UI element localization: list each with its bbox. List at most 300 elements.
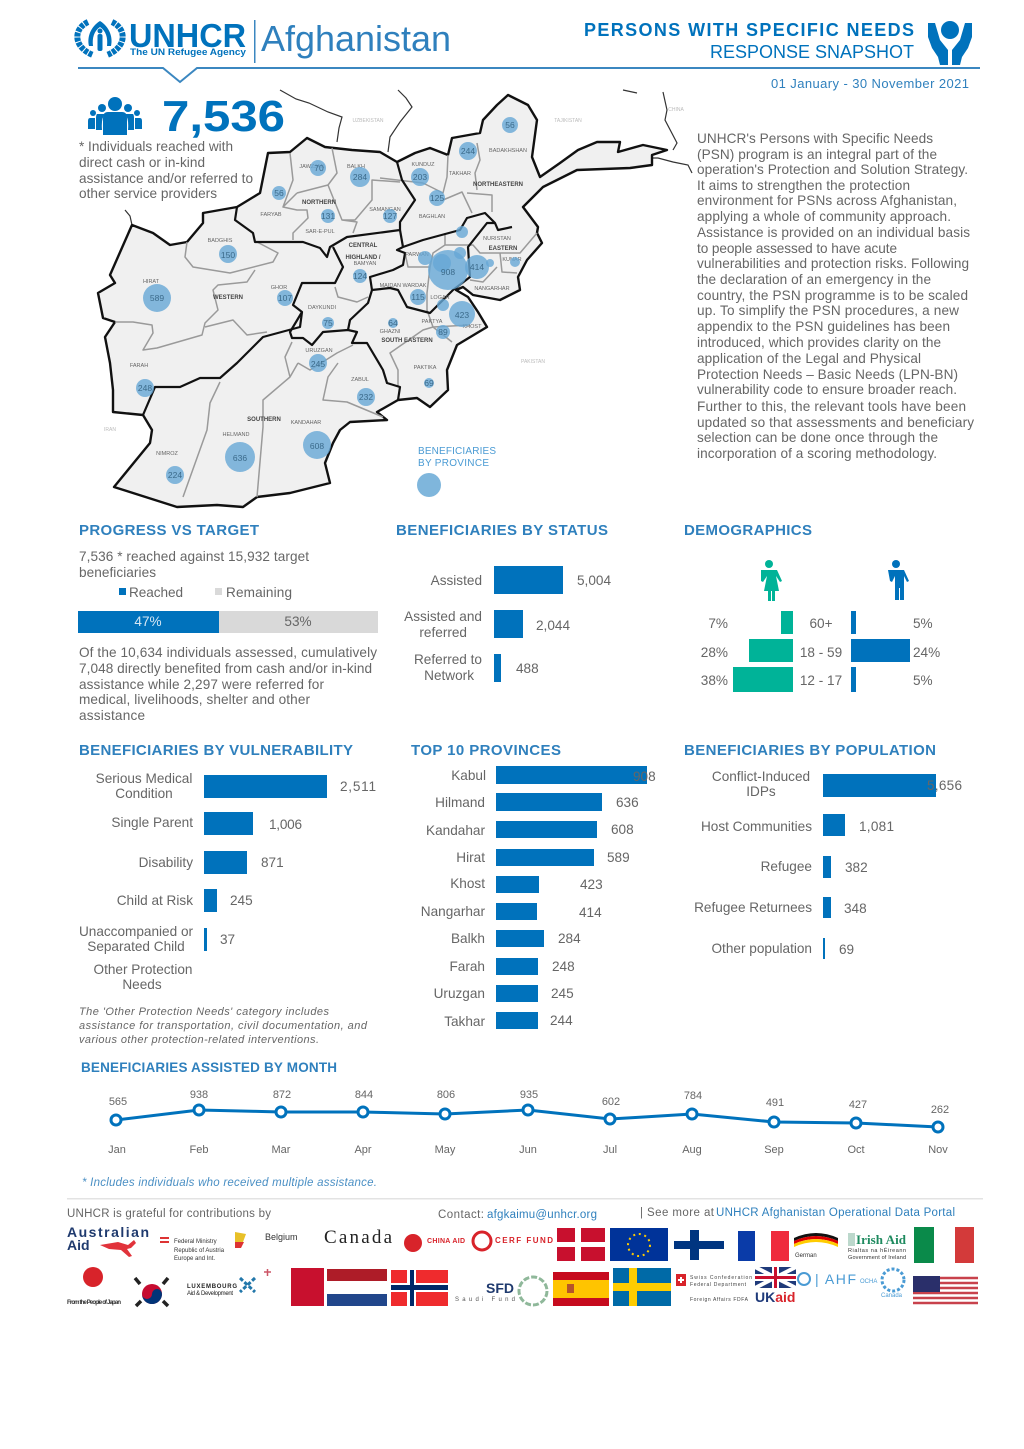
panel: beneficiaries by vulnerability: Needs <box>122 977 162 992</box>
Belgium: Belgium <box>265 1232 298 1242</box>
Saudi Fund for Development <box>455 1277 547 1305</box>
Austria: Republic of Austria <box>174 1248 225 1254</box>
bubble values: 64 <box>388 318 398 328</box>
panel: top 10 provinces: 414 <box>579 905 602 920</box>
flag: Sweden <box>613 1268 671 1306</box>
key figure: individuals reached: 7,536 <box>162 92 285 141</box>
icon: male <box>888 560 909 600</box>
Austria: Federal Ministry <box>174 1239 217 1245</box>
province labels: ZABUL <box>351 377 369 383</box>
panel: progress vs target <box>78 522 378 723</box>
panel: top 10 provinces: Kandahar <box>426 823 485 838</box>
province labels: KUNDUZ <box>412 162 435 168</box>
values: 806 <box>437 1089 455 1101</box>
month axis: Jan <box>108 1144 126 1156</box>
Saudi Fund for Development: SFD <box>486 1280 514 1296</box>
region labels: SOUTH EASTERN <box>381 338 433 344</box>
header rule with pointer <box>78 68 980 82</box>
panel: beneficiaries by vulnerability: Unaccompanied or <box>79 924 194 939</box>
month axis: Apr <box>354 1144 372 1156</box>
province labels: NIMROZ <box>156 451 178 457</box>
panel: progress vs target: 7,536 * reached against 15,932 target <box>79 549 309 564</box>
panel: beneficiaries by status: Referred to <box>414 652 482 667</box>
male bars <box>851 611 910 692</box>
age and share labels: 38% <box>701 673 728 688</box>
values: 427 <box>849 1099 867 1111</box>
panel: top 10 provinces: Balkh <box>451 931 485 946</box>
panel: top 10 provinces: Kabul <box>451 768 486 783</box>
bubble values <box>138 120 515 480</box>
values: 938 <box>190 1089 208 1101</box>
AHF <box>798 1271 877 1287</box>
Irish Aid: Government of Ireland <box>848 1255 906 1261</box>
Irish Aid <box>848 1232 907 1261</box>
footer: contributions and contact: | See more at <box>640 1207 715 1219</box>
flag: European Union <box>610 1228 668 1261</box>
bubble values: 248 <box>138 383 152 393</box>
province labels: PARWAN <box>405 252 429 258</box>
panel: top 10 provinces: Uruzgan <box>434 986 485 1001</box>
country title: Afghanistan <box>261 18 451 59</box>
Japan <box>67 1267 121 1306</box>
province labels: HELMAND <box>223 432 249 438</box>
values: 872 <box>273 1089 291 1101</box>
bubble values: 414 <box>470 262 484 272</box>
province labels <box>130 148 527 457</box>
province labels: PAKTIKA <box>414 365 437 371</box>
month axis: Aug <box>682 1144 702 1156</box>
age and share labels: 7% <box>708 616 728 631</box>
province labels: GHOR <box>271 285 287 291</box>
text: programme narrative: It aims to strengthen the protection <box>697 178 910 193</box>
Switzerland: Swiss Confederation <box>690 1275 752 1281</box>
text: programme narrative: (PSN) program is an integral part of the <box>697 147 937 162</box>
panel: beneficiaries by population: 69 <box>839 942 854 957</box>
icon: hands protecting person <box>928 21 972 65</box>
panel: beneficiaries by vulnerability: BENEFICIARIES BY VULNERABILITY <box>79 742 353 759</box>
AHF: OCHA <box>860 1279 877 1285</box>
Germany <box>794 1233 838 1259</box>
legend: Remaining <box>226 585 292 600</box>
bubble values: 224 <box>168 470 182 480</box>
month axis: Sep <box>764 1144 784 1156</box>
neighbouring country labels: PAKISTAN <box>521 359 545 365</box>
bubble values: 245 <box>311 359 325 369</box>
Australian Aid <box>67 1224 149 1257</box>
text: programme narrative: applying a whole of community approach. <box>697 209 951 224</box>
panel: beneficiaries by status: 2,044 <box>536 618 570 633</box>
header: report title <box>584 20 914 62</box>
Luxembourg: LUXEMBOURG <box>187 1284 237 1290</box>
bubble values: 203 <box>413 172 427 182</box>
panel: top 10 provinces: 589 <box>607 850 630 865</box>
female bars <box>733 611 793 692</box>
province labels: NURISTAN <box>483 236 511 242</box>
province labels: NANGARHAR <box>474 286 510 292</box>
panel: top 10 provinces: 423 <box>580 877 603 892</box>
region labels: HIGHLAND / <box>346 255 381 261</box>
panel: beneficiaries by population: IDPs <box>746 784 776 799</box>
text: programme narrative <box>697 131 974 461</box>
neighbouring borders <box>125 90 692 225</box>
bubble values: 127 <box>383 211 397 221</box>
panel: demographics: DEMOGRAPHICS <box>684 522 812 539</box>
Germany: German <box>795 1253 817 1259</box>
panel: top 10 provinces: 908 <box>633 769 656 784</box>
panel: beneficiaries by status: BENEFICIARIES BY STATUS <box>396 522 608 539</box>
province labels: HIRAT <box>143 279 160 285</box>
UN emblem <box>881 1269 904 1299</box>
panel: progress vs target: assistance <box>79 708 145 723</box>
text: programme narrative: vulnerabilities and protection risks. Following <box>697 256 969 271</box>
text: programme narrative: appendix to the PSN guidelines has been <box>697 319 950 334</box>
header: UNHCR logo and country title <box>77 17 451 63</box>
region labels: EASTERN <box>489 246 517 252</box>
flag: France <box>738 1231 789 1261</box>
text: key figure note: direct cash or in-kind <box>79 155 205 170</box>
panel: beneficiaries by status: referred <box>419 625 467 640</box>
province labels: KUNAR <box>502 257 522 263</box>
panel: beneficiaries by population: Refugee <box>761 859 812 874</box>
province labels: DAYKUNDI <box>308 305 336 311</box>
values: 935 <box>520 1089 538 1101</box>
flag: Monaco <box>291 1268 324 1306</box>
month axis: Mar <box>272 1144 291 1156</box>
Belgium <box>235 1232 298 1248</box>
panel: beneficiaries by status: Assisted <box>431 573 482 588</box>
panel: beneficiaries by status: 488 <box>516 661 539 676</box>
panel: beneficiaries by vulnerability: Other Protection <box>94 962 192 977</box>
panel: beneficiaries by vulnerability: 2,511 <box>340 779 376 794</box>
text: programme narrative: vulnerability code to ensure broader reach. <box>697 382 957 397</box>
text: programme narrative: to people assessed to have acute <box>697 241 897 256</box>
footer: contributions and contact: Contact: <box>438 1209 484 1221</box>
map legend: BY PROVINCE <box>418 458 489 469</box>
region labels: SOUTHERN <box>247 417 281 423</box>
UK aid <box>755 1267 796 1305</box>
bubble values: 75 <box>323 318 333 328</box>
footer: contributions and contact: afgkaimu@unhcr.org <box>487 1209 597 1221</box>
province labels: BALKH <box>347 164 365 170</box>
province labels: SAMANGAN <box>369 207 401 213</box>
province labels: BAGHLAN <box>419 214 445 220</box>
values: 784 <box>684 1090 702 1102</box>
bubble values: 70 <box>314 163 324 173</box>
month axis: Jul <box>603 1144 617 1156</box>
footer: contributions and contact <box>67 1207 955 1221</box>
age and share labels: 18 - 59 <box>800 645 842 660</box>
flag: Republic of Korea <box>135 1278 168 1306</box>
progress bar: 47% <box>134 614 162 629</box>
province labels: KANDAHAR <box>291 420 321 426</box>
panel: top 10 provinces: Hirat <box>456 850 485 865</box>
text: programme narrative: UNHCR's Persons with Specific Needs <box>697 131 933 146</box>
text: programme narrative: country, the PSN programme is to be scaled <box>697 288 968 303</box>
neighbouring country labels <box>104 107 684 433</box>
text: key figure note <box>79 139 253 201</box>
panel: top 10 provinces: 636 <box>616 795 639 810</box>
chart: beneficiaries assisted by month: BENEFICIARIES ASSISTED BY MONTH <box>81 1060 337 1075</box>
panel: beneficiaries by population: Other population <box>711 941 812 956</box>
Switzerland: Federal Department <box>690 1282 747 1288</box>
age and share labels: 12 - 17 <box>800 673 842 688</box>
header: report title: PERSONS WITH SPECIFIC NEEDS <box>584 20 914 40</box>
date range: 01 January - 30 November 2021 <box>771 76 969 91</box>
panel: top 10 provinces: 284 <box>558 931 581 946</box>
age and share labels: 24% <box>913 645 940 660</box>
text: programme narrative: operation's Protection and Solution Strategy. <box>697 162 968 177</box>
note: assistance for transportation, civil documentation, and <box>79 1020 368 1032</box>
values: 565 <box>109 1096 127 1108</box>
bubble values: 636 <box>233 453 247 463</box>
panel: top 10 provinces: 608 <box>611 822 634 837</box>
province labels: FARYAB <box>260 212 282 218</box>
neighbouring country labels: IRAN <box>104 427 116 433</box>
age and share labels: 5% <box>913 616 933 631</box>
bubble values: 589 <box>150 293 164 303</box>
panel: top 10 provinces: TOP 10 PROVINCES <box>411 742 561 759</box>
text: programme narrative: selection can be done once through the <box>697 430 938 445</box>
age and share labels <box>701 616 940 688</box>
province labels: PAKTYA <box>422 319 443 325</box>
legend <box>119 585 292 600</box>
panel: top 10 provinces <box>411 742 656 1029</box>
panel: top 10 provinces: 244 <box>550 1013 573 1028</box>
panel: beneficiaries by vulnerability: Condition <box>115 786 173 801</box>
text: key figure note: other service providers <box>79 186 217 201</box>
map legend: BENEFICIARIES <box>418 446 496 457</box>
region labels: NORTHERN <box>302 200 336 206</box>
bubbles: beneficiaries by province <box>136 117 520 484</box>
note <box>79 1006 368 1046</box>
bubble values: 284 <box>353 172 367 182</box>
Japan: From the People of Japan <box>67 1300 121 1306</box>
bubble values: 69 <box>424 378 434 388</box>
region labels <box>213 182 523 423</box>
progress bar <box>78 611 378 633</box>
note: various other protection-related interventions. <box>79 1034 319 1046</box>
Luxembourg <box>187 1269 271 1297</box>
chart: beneficiaries assisted by month <box>81 1060 949 1156</box>
panel: beneficiaries by population: 348 <box>844 901 867 916</box>
panel: beneficiaries by population: 1,081 <box>859 819 894 834</box>
panel: top 10 provinces: Hilmand <box>435 795 485 810</box>
panel: beneficiaries by vulnerability: Separated Child <box>87 939 185 954</box>
bubble values: 423 <box>455 310 469 320</box>
province labels: JAWZJAN <box>299 164 325 170</box>
province labels: KHOST <box>463 324 482 330</box>
China Aid: CHINA AID <box>427 1238 465 1245</box>
footer: contributions and contact: UNHCR Afghanistan Operational Data Portal <box>716 1207 955 1219</box>
Canada: Canada <box>324 1227 393 1248</box>
progress bar: 53% <box>284 614 312 629</box>
panel: beneficiaries by population: 382 <box>845 860 868 875</box>
CERF <box>473 1232 553 1250</box>
bubble values: 150 <box>221 250 235 260</box>
province labels: SAR-E-PUL <box>305 229 335 235</box>
Australian Aid: Aid <box>67 1237 90 1253</box>
bubble values: 124 <box>353 271 367 281</box>
Switzerland: Foreign Affairs FDFA <box>690 1297 749 1303</box>
panel: beneficiaries by population: Refugee Returnees <box>694 900 812 915</box>
panel: beneficiaries by vulnerability: Single Parent <box>111 815 193 830</box>
panel: progress vs target: assistance while 2,297 were referred for <box>79 677 324 692</box>
text: programme narrative: introduced, which provides clarity on the <box>697 335 941 350</box>
region labels: NORTHEASTERN <box>473 182 523 188</box>
values <box>109 1089 949 1116</box>
legend: Reached <box>129 585 183 600</box>
month axis: May <box>435 1144 456 1156</box>
flag: Netherlands <box>327 1269 387 1306</box>
bubble values: 131 <box>321 211 335 221</box>
bubble values: 232 <box>359 392 373 402</box>
age and share labels: 60+ <box>809 616 833 631</box>
panel: beneficiaries by vulnerability: 245 <box>230 893 253 908</box>
panel: beneficiaries by population: 5,656 <box>927 778 962 793</box>
panel: top 10 provinces: 245 <box>551 986 574 1001</box>
province labels: FARAH <box>130 363 148 369</box>
province labels: BADGHIS <box>208 238 233 244</box>
AHF: | AHF <box>815 1271 856 1287</box>
values: 262 <box>931 1104 949 1116</box>
bubble values: 115 <box>411 292 425 302</box>
province labels: GHAZNI <box>380 329 401 335</box>
province labels: BAMYAN <box>354 261 376 267</box>
text: programme narrative: environment for PSNs across Afghanistan, <box>697 193 957 208</box>
region labels: WESTERN <box>213 295 243 301</box>
Switzerland <box>676 1274 752 1303</box>
panel: beneficiaries by vulnerability: 871 <box>261 855 284 870</box>
panel: beneficiaries by status: 5,004 <box>577 573 611 588</box>
Australian Aid: Australian <box>67 1224 149 1240</box>
panel: top 10 provinces: Khost <box>450 876 485 891</box>
text: programme narrative: application of the Legal and Physical <box>697 351 921 366</box>
panel: beneficiaries by population: Conflict-Induced <box>712 769 810 784</box>
bubble values: 89 <box>438 327 448 337</box>
panel: beneficiaries by vulnerability: Serious Medical <box>96 771 192 786</box>
month axis: Nov <box>928 1144 948 1156</box>
logo tagline: The UN Refugee Agency <box>130 47 246 57</box>
panel: demographics <box>684 522 940 692</box>
age and share labels: 5% <box>913 673 933 688</box>
region boundaries <box>143 162 512 415</box>
markers <box>111 1105 943 1132</box>
footer: contributions and contact: UNHCR is grateful for contributions by <box>67 1208 271 1220</box>
panel: top 10 provinces: Farah <box>449 959 485 974</box>
panel: beneficiaries by vulnerability: 37 <box>220 932 235 947</box>
flag: Denmark <box>557 1228 605 1261</box>
bubble values: 56 <box>274 188 284 198</box>
bubble values: 125 <box>430 193 444 203</box>
flag: Finland <box>674 1228 724 1261</box>
province labels: URUZGAN <box>305 348 333 354</box>
panel: top 10 provinces: 248 <box>552 959 575 974</box>
icon: UNHCR laurel emblem <box>77 21 123 55</box>
panel: beneficiaries by population: Host Communities <box>701 819 812 834</box>
bubble values: 244 <box>461 146 475 156</box>
panel: beneficiaries by status: Network <box>424 668 474 683</box>
Austria: Europe and Int. <box>174 1256 215 1262</box>
text: key figure note: assistance and/or referred to <box>79 171 253 186</box>
text: programme narrative: Protection Needs – Basic Needs (LPN-BN) <box>697 367 958 382</box>
Saudi Fund for Development: Saudi Fund <box>455 1297 515 1303</box>
month axis: Jun <box>519 1144 537 1156</box>
text: programme narrative: the declaration of an emergency in the <box>697 272 931 287</box>
panel: top 10 provinces: Takhar <box>444 1014 485 1029</box>
panel: map of Afghanistan <box>98 90 692 507</box>
text: programme narrative: Further to this, the relevant tools have been <box>697 399 966 414</box>
province labels: MAIDAN WARDAK <box>380 283 427 289</box>
month axis <box>108 1144 948 1156</box>
icon: group of people <box>88 97 142 135</box>
text: programme narrative: incorporation of a scoring methodology. <box>697 446 937 461</box>
panel: progress vs target: 7,048 directly benefited from cash and/or in-kind <box>79 661 372 676</box>
age and share labels: 28% <box>701 645 728 660</box>
note: The 'Other Protection Needs' category includes <box>79 1006 330 1018</box>
panel: progress vs target: beneficiaries <box>79 565 156 580</box>
panel: beneficiaries by vulnerability: Disability <box>139 855 193 870</box>
icon: female <box>761 560 782 601</box>
panel: top 10 provinces: Nangarhar <box>421 904 485 919</box>
month axis: Feb <box>190 1144 208 1156</box>
UNHCR wordmark: UNHCR <box>129 17 246 54</box>
country outline and fill <box>98 95 667 507</box>
footnote: * Includes individuals who received multiple assistance. <box>82 1177 377 1189</box>
values: 491 <box>766 1097 784 1109</box>
panel: beneficiaries by vulnerability <box>79 742 376 1046</box>
neighbouring country labels: CHINA <box>668 107 684 113</box>
bubble values: 608 <box>310 441 324 451</box>
province boundaries <box>115 143 537 497</box>
bubble values: 908 <box>441 267 455 277</box>
panel: beneficiaries by vulnerability: Child at Risk <box>117 893 193 908</box>
flag: Norway <box>391 1270 448 1306</box>
Irish Aid: Irish Aid <box>856 1232 907 1247</box>
panel: beneficiaries by status <box>396 522 611 683</box>
month axis: Oct <box>847 1144 865 1156</box>
flag: Italy <box>914 1227 974 1263</box>
province labels: TAKHAR <box>449 171 471 177</box>
province labels: LOGAR <box>430 295 450 301</box>
flag: United States <box>913 1276 978 1306</box>
neighbouring country labels: UZBEKISTAN <box>352 118 384 124</box>
province labels: BADAKHSHAN <box>489 148 527 154</box>
header: report title: RESPONSE SNAPSHOT <box>710 42 914 62</box>
panel: progress vs target: medical, livelihoods, shelter and other <box>79 692 310 707</box>
Luxembourg: Aid & Development <box>187 1291 233 1297</box>
values: 844 <box>355 1089 373 1101</box>
bubble values: 107 <box>278 293 292 303</box>
bubble values: 56 <box>505 120 515 130</box>
panel: progress vs target: Of the 10,634 individuals assessed, cumulatively <box>79 645 377 660</box>
text: key figure note: * Individuals reached with <box>79 139 233 154</box>
panel: beneficiaries by population <box>684 742 962 959</box>
Irish Aid: Rialtas na hÉireann <box>848 1247 906 1254</box>
text: programme narrative: updated so that assessments and beneficiary <box>697 415 974 430</box>
UN emblem: Canada <box>881 1293 903 1299</box>
panel: beneficiaries by status: Assisted and <box>404 609 482 624</box>
CERF: CERF FUND <box>495 1236 553 1245</box>
flag: Spain <box>553 1272 609 1306</box>
map legend <box>417 446 496 497</box>
UK aid: UKaid <box>755 1289 795 1305</box>
panel: beneficiaries by vulnerability: 1,006 <box>269 817 302 832</box>
panel: beneficiaries by population: BENEFICIARIES BY POPULATION <box>684 742 936 759</box>
text: programme narrative: Assistance is provided on an individual basis <box>697 225 970 240</box>
neighbouring country labels: TAJIKISTAN <box>554 118 582 124</box>
Austria <box>160 1237 225 1262</box>
panel: progress vs target: PROGRESS VS TARGET <box>79 522 259 539</box>
